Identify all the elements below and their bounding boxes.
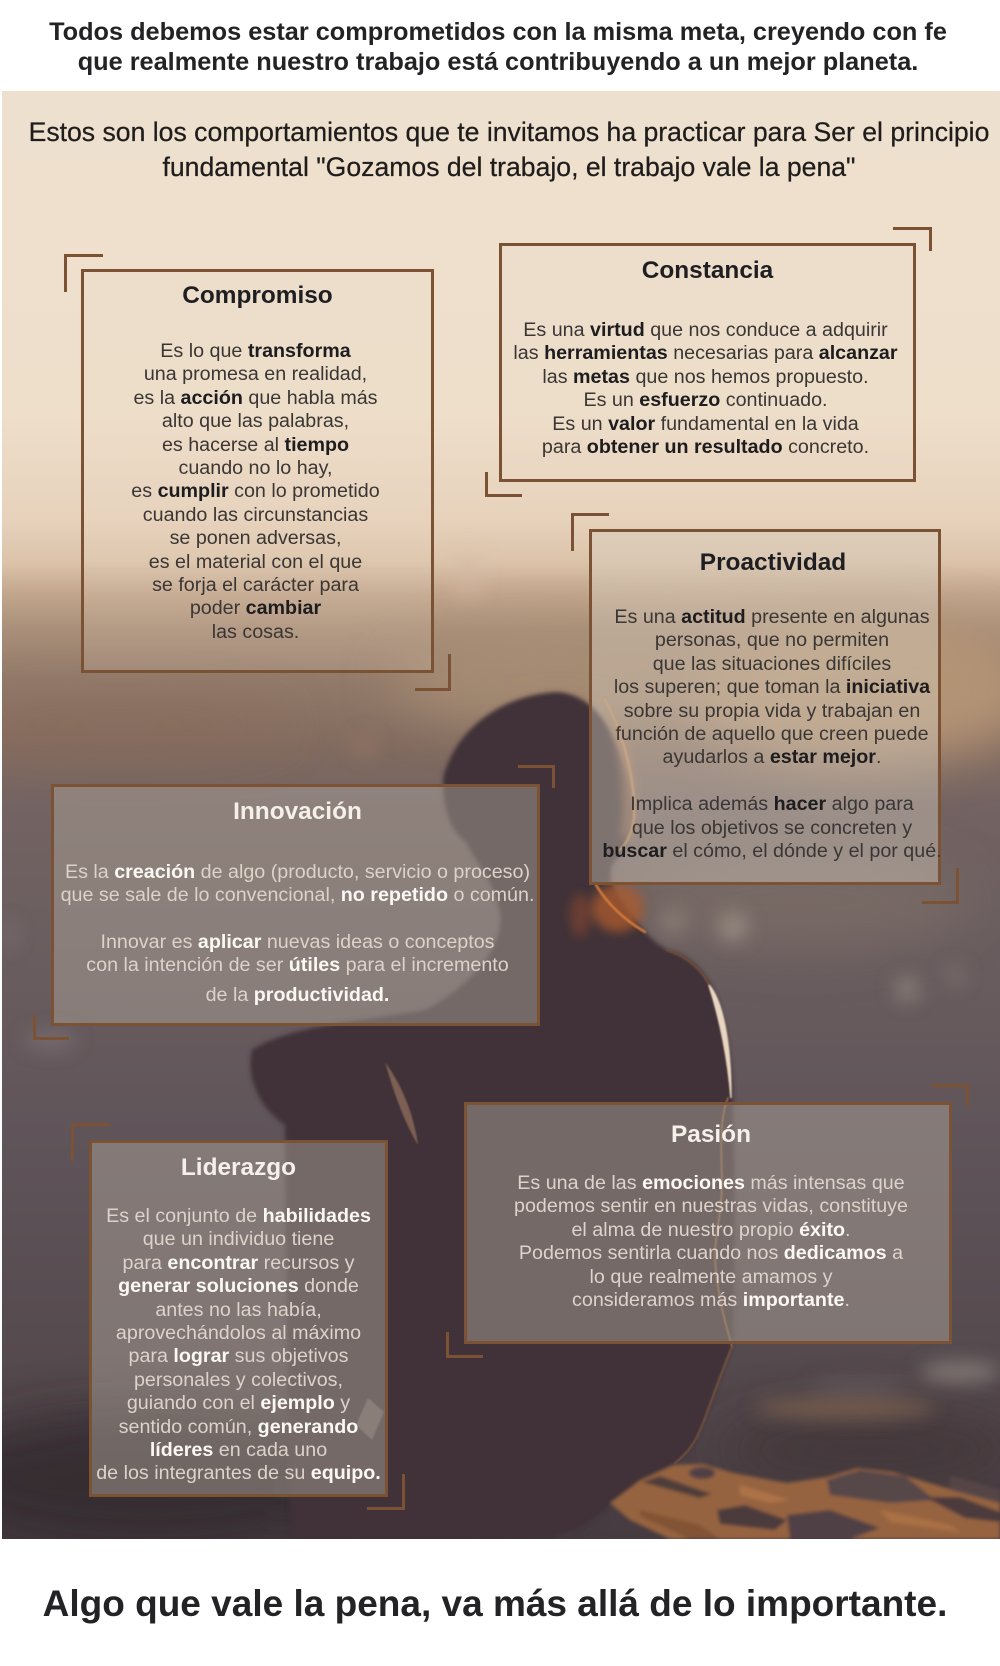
corner bracket bottom-left <box>485 472 522 497</box>
panel: Proactividad <box>571 513 959 904</box>
text: Es el conjunto de habilidades <box>106 1205 371 1227</box>
text: sobre su propia vida y trabajan en <box>624 700 920 722</box>
text: generar soluciones donde <box>118 1275 359 1297</box>
intro heading: Estos son los comportamientos que te invitamos ha practicar para Ser el principio <box>29 117 989 147</box>
corner bracket top-right <box>931 1084 969 1106</box>
panel: Liderazgo <box>71 1123 405 1510</box>
heading: Compromiso <box>182 282 333 309</box>
box frame <box>89 1140 388 1497</box>
text: para lograr sus objetivos <box>129 1345 348 1367</box>
text: que las situaciones difíciles <box>653 653 891 675</box>
text: el alma de nuestro propio éxito. <box>571 1219 851 1241</box>
hair rim light <box>596 700 732 1463</box>
corner bracket top-left <box>571 513 609 551</box>
text: para encontrar recursos y <box>123 1252 354 1274</box>
text: líderes en cada uno <box>150 1439 327 1461</box>
text: Es una de las emociones más intensas que <box>517 1172 905 1194</box>
text: personas, que no permiten <box>655 629 889 651</box>
box frame <box>464 1102 952 1344</box>
panel: Constancia <box>485 227 932 497</box>
text: se ponen adversas, <box>170 527 341 549</box>
text: Es una virtud que nos conduce a adquirir <box>523 319 888 341</box>
text: lo que realmente amamos y <box>590 1266 832 1288</box>
corner bracket bottom-right <box>922 868 959 904</box>
heading: Proactividad <box>700 549 846 576</box>
intro heading <box>29 117 989 182</box>
corner bracket bottom-right <box>367 1474 405 1510</box>
text: Es un esfuerzo continuado. <box>583 389 828 411</box>
shoulder rim light <box>709 985 731 1098</box>
rock <box>610 1464 1000 1539</box>
panel: Innovación <box>33 765 555 1040</box>
text: que un individuo tiene <box>143 1228 334 1250</box>
text <box>131 340 380 643</box>
text: poder cambiar <box>190 597 321 619</box>
top quote <box>49 18 947 76</box>
intro heading: fundamental "Gozamos del trabajo, el trabajo vale la pena" <box>162 152 856 182</box>
text: función de aquello que creen puede <box>615 723 929 745</box>
text: Es un valor fundamental en la vida <box>552 413 859 435</box>
heading: Liderazgo <box>181 1154 296 1181</box>
heading: Pasión <box>671 1121 751 1148</box>
text: para obtener un resultado concreto. <box>542 436 869 458</box>
text: es hacerse al tiempo <box>162 434 349 456</box>
text: aprovechándolos al máximo <box>116 1322 361 1344</box>
corner bracket top-left <box>71 1123 110 1161</box>
text: Es una actitud presente en algunas <box>614 606 930 628</box>
text: Innovar es aplicar nuevas ideas o conceptos <box>100 931 495 953</box>
text <box>514 1172 908 1311</box>
corner bracket bottom-right <box>415 654 451 691</box>
text <box>96 1205 381 1484</box>
panel: Compromiso <box>64 254 451 691</box>
text: sentido común, generando <box>119 1416 358 1438</box>
text: Es la creación de algo (producto, servicio o proceso) <box>65 861 530 883</box>
text: de los integrantes de su equipo. <box>96 1462 381 1484</box>
text: consideramos más importante. <box>572 1289 850 1311</box>
corner bracket bottom-left <box>446 1332 483 1358</box>
text: cuando las circunstancias <box>143 504 368 526</box>
text: ayudarlos a estar mejor. <box>663 746 881 768</box>
top quote: que realmente nuestro trabajo está contribuyendo a un mejor planeta. <box>78 48 918 76</box>
text: una promesa en realidad, <box>144 363 367 385</box>
text: las metas que nos hemos propuesto. <box>542 366 869 388</box>
hair glow <box>570 720 644 937</box>
text <box>513 319 898 458</box>
text: Podemos sentirla cuando nos dedicamos a <box>519 1242 903 1264</box>
text: podemos sentir en nuestras vidas, constituye <box>514 1195 908 1217</box>
box frame <box>81 269 434 673</box>
text: guiando con el ejemplo y <box>127 1392 350 1414</box>
panel: Pasión <box>446 1084 969 1358</box>
heading: Constancia <box>642 257 773 284</box>
woman silhouette <box>250 692 734 1539</box>
text: buscar el cómo, el dónde y el por qué. <box>602 840 942 862</box>
box frame <box>51 784 540 1026</box>
text: Implica además hacer algo para <box>630 793 914 815</box>
text: antes no las había, <box>155 1299 322 1321</box>
text <box>61 861 534 906</box>
text: alto que las palabras, <box>162 410 349 432</box>
text: cuando no lo hay, <box>178 457 332 479</box>
text: es la acción que habla más <box>133 387 378 409</box>
text: las herramientas necesarias para alcanzar <box>513 342 898 364</box>
text: las cosas. <box>212 621 299 643</box>
box frame <box>499 243 916 482</box>
text: se forja el carácter para <box>152 574 359 596</box>
text: que se sale de lo convencional, no repetido o común. <box>61 884 534 906</box>
corner bracket top-right <box>518 765 555 788</box>
text <box>86 931 509 976</box>
text: que los objetivos se concreten y <box>632 817 912 839</box>
text: de la productividad. <box>206 984 389 1006</box>
box frame <box>589 529 941 885</box>
closing statement: Algo que vale la pena, va más allá de lo importante. <box>43 1583 947 1624</box>
corner bracket top-left <box>64 254 103 292</box>
text: Es lo que transforma <box>160 340 351 362</box>
text <box>602 606 942 862</box>
text: con la intención de ser útiles para el incremento <box>86 954 509 976</box>
corner bracket bottom-left <box>33 1015 69 1040</box>
corner bracket top-right <box>893 227 932 251</box>
top quote: Todos debemos estar comprometidos con la misma meta, creyendo con fe <box>49 18 947 46</box>
text: personales y colectivos, <box>134 1369 343 1391</box>
text: es cumplir con lo prometido <box>131 480 380 502</box>
heading: Innovación <box>233 798 362 825</box>
text: es el material con el que <box>149 551 362 573</box>
text: los superen; que toman la iniciativa <box>614 676 930 698</box>
